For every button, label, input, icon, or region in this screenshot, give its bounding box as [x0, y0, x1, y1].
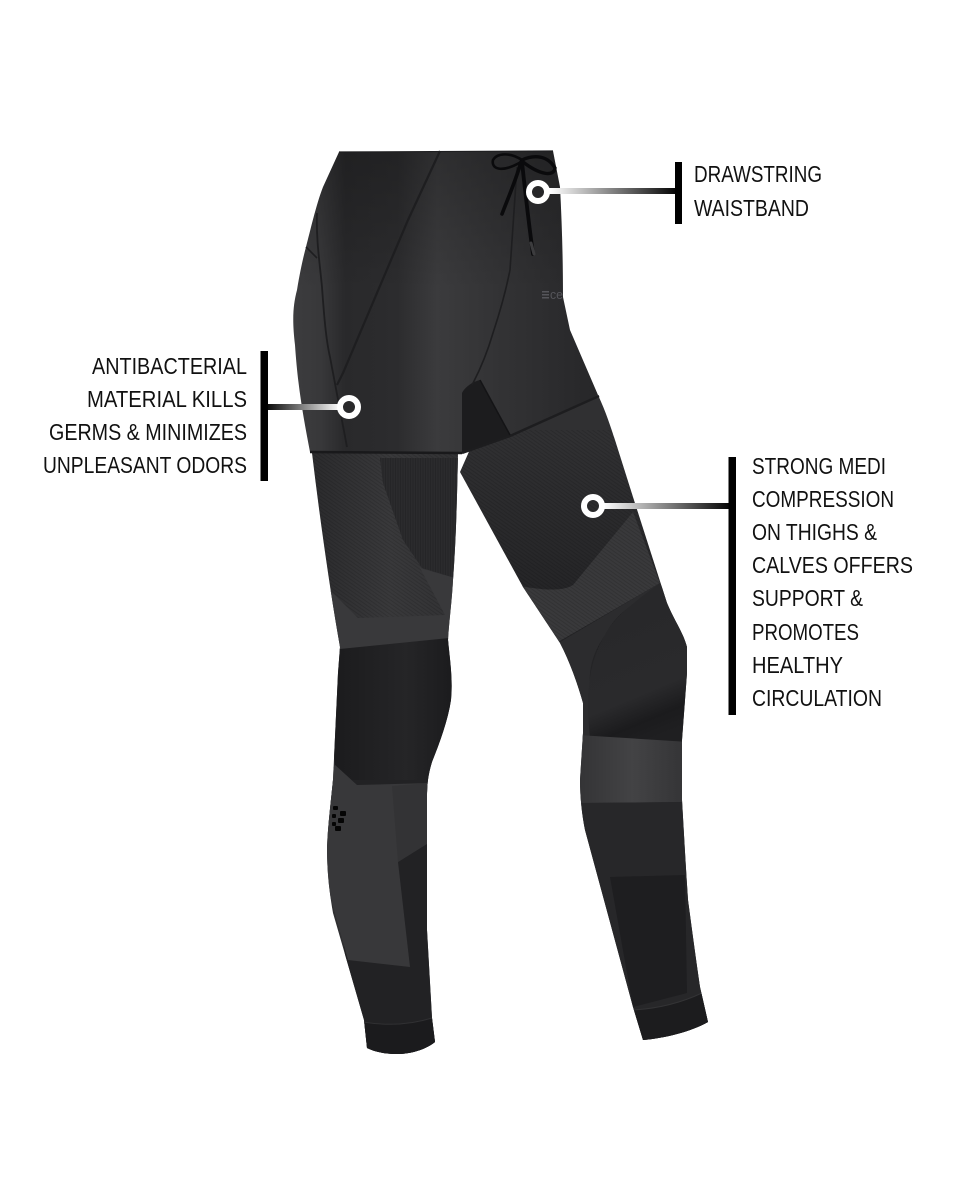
lower thigh lighter panel — [330, 568, 455, 650]
callout: strong medi compression — [584, 453, 913, 715]
knee panel — [330, 638, 456, 785]
marker ring — [584, 497, 602, 515]
waist logo: ce — [550, 287, 563, 302]
label text: CIRCULATION — [752, 685, 882, 711]
calf panel — [320, 765, 430, 967]
infographic canvas — [44, 150, 912, 1054]
drawstring tie — [493, 154, 555, 254]
label text: STRONG MEDI — [752, 453, 886, 479]
ribbed calf zone — [610, 875, 687, 1007]
label text: WAISTBAND — [694, 195, 809, 221]
hem line left — [310, 452, 462, 453]
label text — [43, 353, 247, 478]
thigh compression knit — [460, 433, 661, 584]
lower thigh panel — [560, 586, 654, 739]
label text — [694, 161, 822, 221]
right leg (viewer's right) — [460, 395, 708, 1040]
callout: antibacterial material — [43, 351, 358, 481]
marker ring — [529, 183, 547, 201]
label text: ANTIBACTERIAL — [92, 353, 247, 379]
hip seam — [317, 213, 347, 447]
label text: GERMS & MINIMIZES — [49, 419, 247, 445]
diagonal thigh band — [515, 512, 660, 642]
label text: HEALTHY — [752, 652, 843, 678]
callout: drawstring waistband — [529, 161, 822, 224]
label text: MATERIAL KILLS — [87, 386, 247, 412]
label text — [752, 453, 913, 711]
label text: UNPLEASANT ODORS — [43, 452, 247, 478]
ankle and shin base — [328, 780, 435, 1054]
waist top edge — [339, 151, 553, 152]
label text: ON THIGHS & — [752, 519, 877, 545]
logo mark on left calf — [332, 806, 346, 831]
ankle cuff — [364, 1018, 435, 1054]
marker ring — [340, 398, 358, 416]
connector line — [547, 188, 678, 194]
lower calf — [581, 802, 708, 1040]
front rise seam — [472, 167, 517, 385]
label text: COMPRESSION — [752, 486, 894, 512]
label text: PROMOTES — [752, 619, 859, 645]
bracket bar — [260, 351, 268, 481]
bracket bar — [728, 457, 736, 715]
tights product illustration — [285, 145, 720, 1060]
label text: CALVES OFFERS — [752, 552, 913, 578]
connector line — [602, 503, 732, 509]
label text: SUPPORT & — [752, 585, 863, 611]
shorts body — [285, 145, 605, 460]
crotch gusset — [462, 380, 510, 452]
hem line right — [462, 396, 599, 453]
left leg (viewer's left) — [312, 453, 458, 1054]
shorts section — [285, 145, 605, 460]
upper calf panel — [580, 735, 682, 803]
inner thigh ribbed panel — [380, 458, 460, 578]
ankle cuff — [634, 994, 708, 1040]
waistband seam — [337, 151, 440, 385]
waist logo — [542, 287, 563, 302]
bracket bar — [675, 162, 682, 224]
knee panel — [588, 583, 690, 745]
connector line — [264, 404, 342, 410]
label text: DRAWSTRING — [694, 161, 822, 187]
